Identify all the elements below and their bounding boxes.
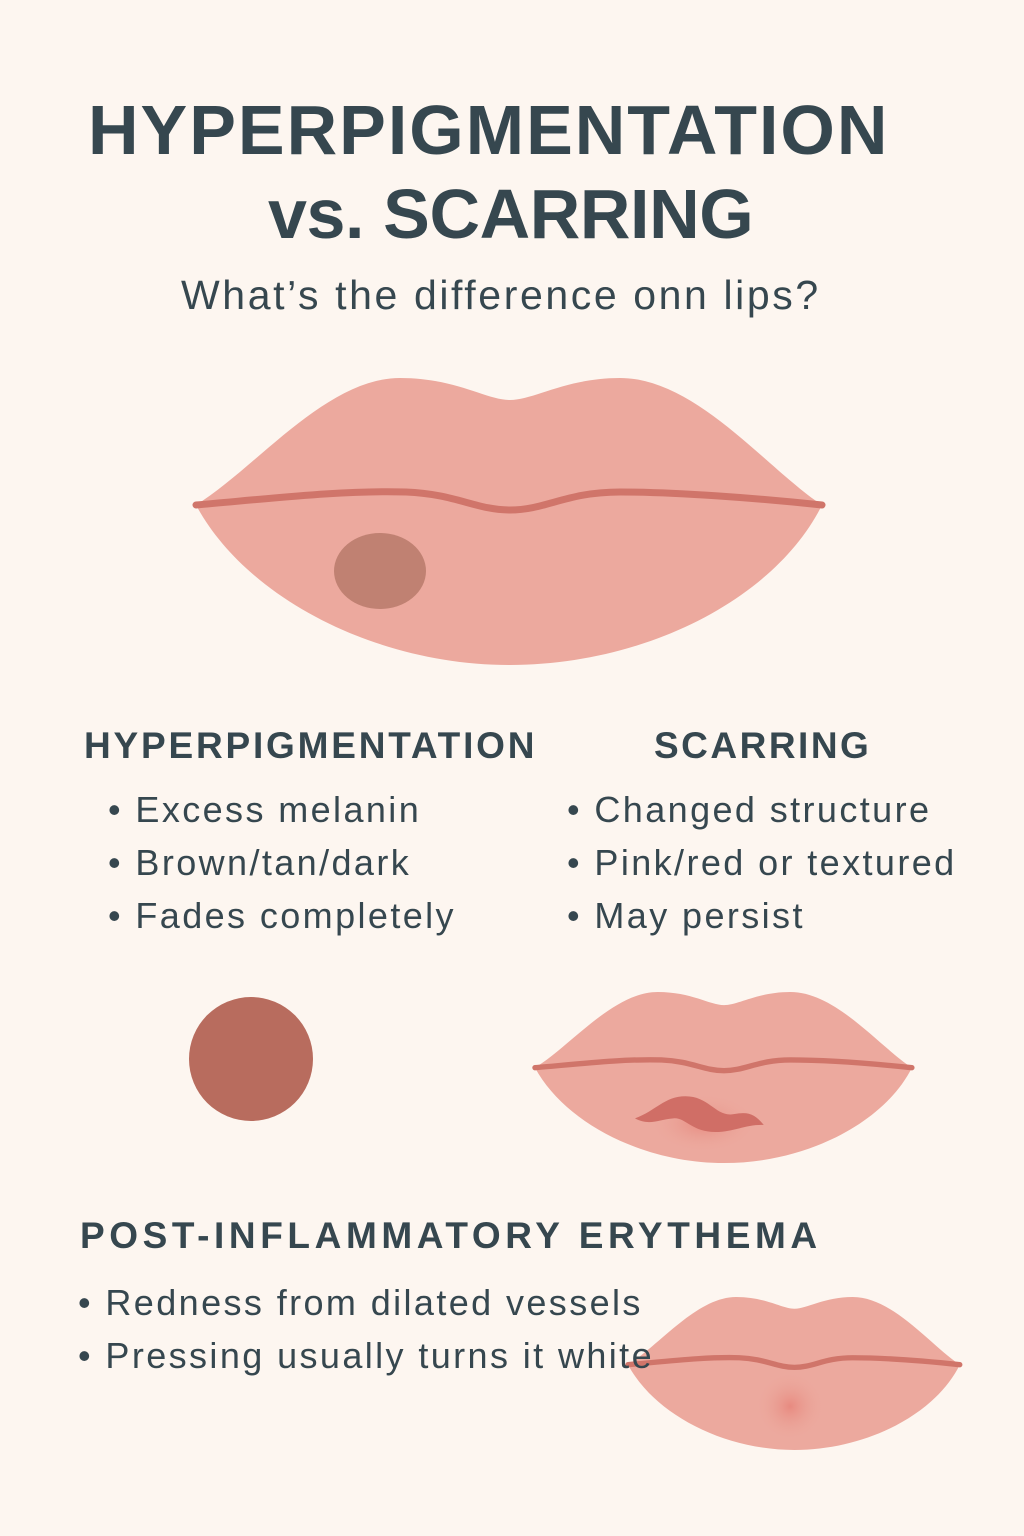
heading: hyperpigmentation: HYPERPIGMENTATION [84, 725, 537, 766]
list: erythema: • Redness from dilated vessels [78, 1282, 643, 1323]
heading: scarring: SCARRING [654, 725, 871, 766]
scar lips [535, 992, 912, 1163]
erythema lips [628, 1297, 960, 1450]
list: hyperpigmentation: • Excess melanin [108, 789, 421, 830]
title line 2: vs. SCARRING [268, 175, 753, 253]
list: scarring: • Pink/red or textured [567, 842, 957, 883]
list: hyperpigmentation: • Brown/tan/dark [108, 842, 411, 883]
large lips with dark spot [196, 378, 822, 665]
list: hyperpigmentation: • Fades completely [108, 895, 456, 936]
title line 1: HYPERPIGMENTATION [88, 91, 889, 169]
heading: post-inflammatory erythema: POST-INFLAMMATORY ERYTHEMA [80, 1215, 822, 1256]
list: scarring [567, 789, 957, 936]
list: scarring: • Changed structure [567, 789, 931, 830]
list: erythema: • Pressing usually turns it white [78, 1335, 654, 1376]
subtitle: What’s the difference onn lips? [181, 272, 821, 318]
icon: hyperpigmentation circle [189, 997, 313, 1121]
list: hyperpigmentation [108, 789, 456, 936]
list: scarring: • May persist [567, 895, 805, 936]
list: erythema [78, 1282, 654, 1376]
